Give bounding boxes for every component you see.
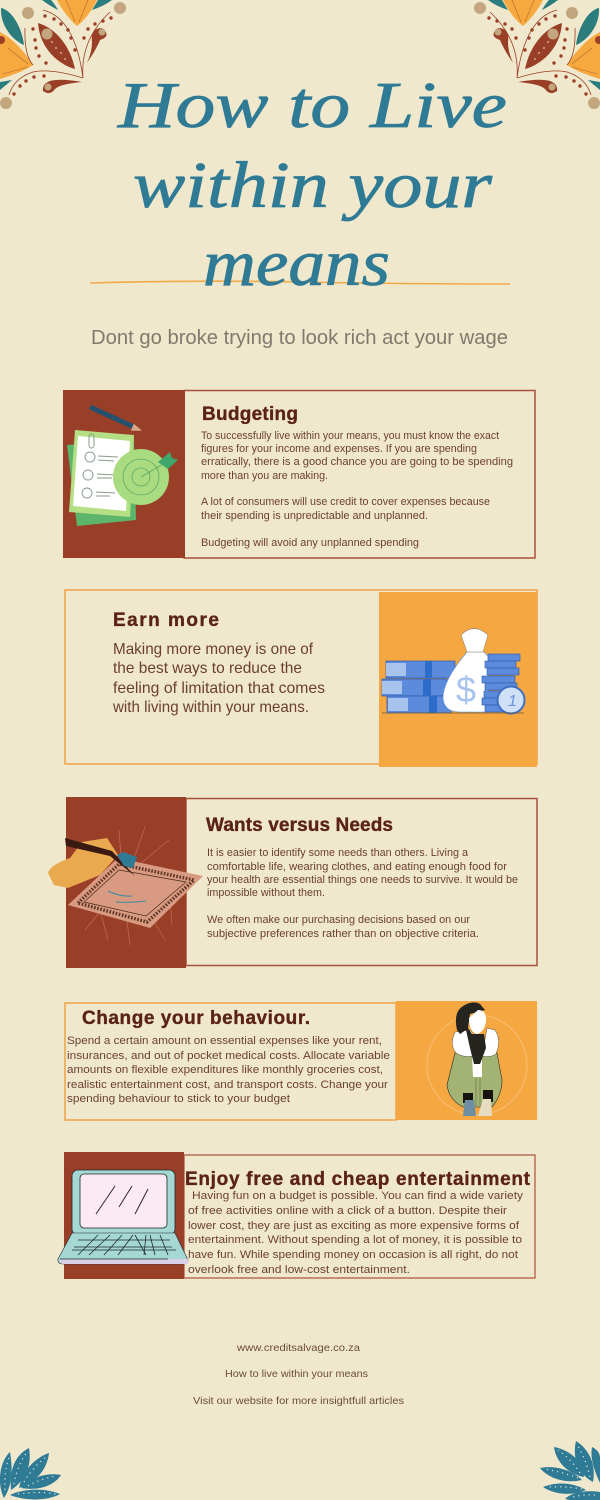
text block: subjective preferences rather than on objective criteria.: [207, 928, 479, 940]
icon: money bag and stacks: 1: [508, 693, 517, 710]
text block: your health are essential things one needs to survive. It would be: [207, 874, 518, 886]
heading: Enjoy free and cheap entertainment: [185, 1169, 531, 1190]
text block: Having fun on a budget is possible. You can find a wide variety: [192, 1190, 524, 1202]
title: [117, 69, 507, 300]
text block: impossible without them.: [207, 887, 325, 899]
icon: hand writing on a framed sheet: [48, 827, 203, 945]
text block: [201, 430, 513, 549]
text block: It is easier to identify some needs than others. Living a: [207, 847, 469, 859]
text block: [67, 1035, 390, 1105]
icon: bottom-left leaves: [0, 1448, 61, 1499]
title: means: [203, 227, 390, 300]
text block: more than you are making.: [201, 470, 328, 482]
divider line behind title: [90, 281, 510, 284]
text block: feeling of limitation that comes: [113, 680, 325, 697]
text block: comfortable life, wearing clothes, and eating enough food for: [207, 861, 507, 873]
icon: laptop: [58, 1170, 188, 1264]
footer text: [193, 1342, 404, 1407]
footer text: Visit our website for more insightfull articles: [193, 1395, 404, 1407]
heading: Wants versus Needs: [206, 815, 394, 836]
panel: budgeting: [63, 390, 535, 558]
text block: Budgeting will avoid any unplanned spending: [201, 537, 419, 549]
text block: the best ways to reduce the: [113, 660, 302, 677]
icon: checklist and target: [67, 407, 178, 526]
text block: [207, 847, 518, 940]
title: within your: [133, 149, 492, 222]
heading: Earn more: [113, 610, 220, 631]
footer text: www.creditsalvage.co.za: [236, 1342, 360, 1354]
icon: top-left floral ornament: [0, 0, 126, 109]
text block: of free activities online with a click of a button. Despite their: [188, 1205, 507, 1217]
icon: money bag and stacks: $: [456, 669, 476, 710]
heading: Budgeting: [202, 404, 299, 425]
text block: insurances, and out of pocket medical costs. Allocate variable: [67, 1050, 390, 1062]
text block: [112, 641, 325, 716]
panel: wants versus needs: [48, 797, 537, 968]
text block: their spending is unpredictable and unplanned.: [201, 510, 428, 522]
text block: erratically, there is a good chance you are going to be spending: [201, 456, 513, 468]
panel: enjoy free and cheap entertainment: [58, 1152, 535, 1279]
text block: A lot of consumers will use credit to cover expenses because: [201, 496, 490, 508]
text block: To successfully live within your means, you must know the exact: [201, 430, 499, 442]
text block: [188, 1190, 524, 1276]
text block: Spend a certain amount on essential expenses like your rent,: [67, 1035, 382, 1047]
icon: top-right floral ornament: [474, 0, 600, 109]
title: How to Live: [117, 69, 507, 142]
icon: bottom-right leaves: [540, 1441, 600, 1500]
text block: We often make our purchasing decisions based on our: [207, 914, 470, 926]
panel: change your behaviour: [65, 1001, 537, 1120]
text block: with living within your means.: [112, 699, 309, 716]
panel: earn more: [65, 590, 537, 767]
heading: Change your behaviour.: [82, 1008, 311, 1029]
icon: girl holding her head: [427, 1002, 527, 1116]
text block: overlook free and low-cost entertainment.: [188, 1264, 410, 1276]
text block: lower cost, they are just as exciting as more expensive forms of: [188, 1220, 520, 1232]
text block: realistic entertainment cost, and transport costs. Change your: [67, 1079, 388, 1091]
footer text: How to live within your means: [225, 1368, 368, 1380]
text block: entertainment. Without spending a lot of money, it is possible to: [188, 1234, 522, 1246]
subtitle: Dont go broke trying to look rich act your wage: [91, 327, 508, 349]
text block: figures for your income and expenses. If you are spending: [201, 443, 477, 455]
text block: have fun. While spending money on occasion is all right, do not: [188, 1249, 518, 1261]
text block: spending behaviour to stick to your budget: [67, 1093, 290, 1105]
text block: Making more money is one of: [113, 641, 314, 658]
text block: amounts on flexible expenditures like monthly groceries cost,: [67, 1064, 383, 1076]
icon: money bag and stacks: [382, 628, 524, 714]
